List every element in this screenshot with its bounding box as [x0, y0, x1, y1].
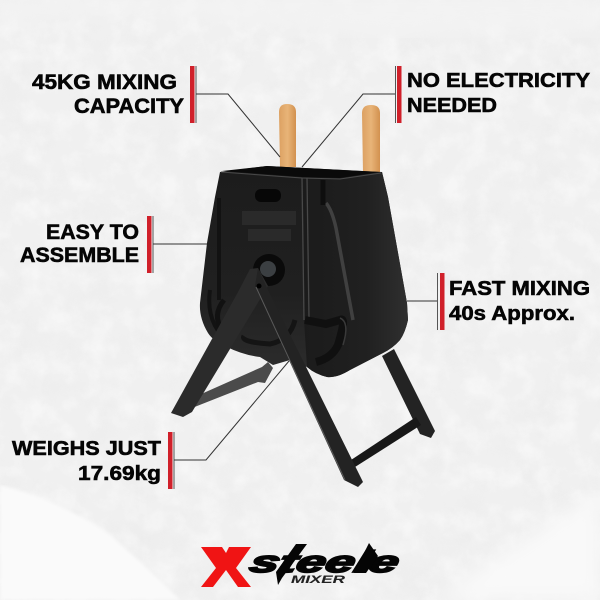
paddle: left wooden handle — [279, 104, 296, 167]
callout: no electricity needed — [302, 66, 590, 167]
stand: left crossbar — [190, 362, 273, 408]
callout: no electricity needed: NEEDED — [407, 94, 497, 117]
callout: weighs just 17.69kg: 17.69kg — [78, 462, 161, 485]
stand: right crossbar — [351, 417, 421, 467]
callout: easy to assemble: ASSEMBLE — [20, 244, 139, 267]
callout: 45kg mixing capacity: 45KG MIXING — [32, 71, 177, 94]
callout: easy to assemble — [20, 216, 207, 273]
callout: 45kg mixing capacity — [32, 66, 280, 157]
logo swash: tall t stem — [276, 544, 307, 585]
callout: easy to assemble: EASY TO — [46, 221, 139, 244]
callout: fast mixing 40s approx — [407, 273, 590, 330]
product: mixer drum — [200, 166, 408, 377]
callout: fast mixing 40s approx: FAST MIXING — [449, 277, 590, 300]
axle hub — [253, 254, 285, 286]
logo subtitle: MIXER — [291, 574, 345, 586]
callout: 45kg mixing capacity: CAPACITY — [74, 95, 184, 118]
callout: fast mixing 40s approx: 40s Approx. — [449, 302, 575, 325]
callout: no electricity needed: NO ELECTRICITY — [407, 69, 590, 92]
paddle: right wooden handle — [362, 105, 380, 173]
callout: weighs just 17.69kg — [12, 361, 289, 489]
drum opening — [222, 166, 380, 178]
stand: rear right leg — [382, 349, 435, 438]
drum side panel — [303, 172, 408, 377]
logo: Steele Mixer — [201, 543, 404, 587]
callout: weighs just 17.69kg: WEIGHS JUST — [12, 437, 161, 460]
embossed brand on drum — [242, 211, 296, 241]
stand: front A-frame — [171, 268, 363, 487]
logo swash: tall l stem — [354, 543, 378, 573]
handle slot — [255, 189, 281, 202]
logo wordmark: steele — [246, 546, 404, 579]
logo mark: red X — [201, 547, 251, 587]
